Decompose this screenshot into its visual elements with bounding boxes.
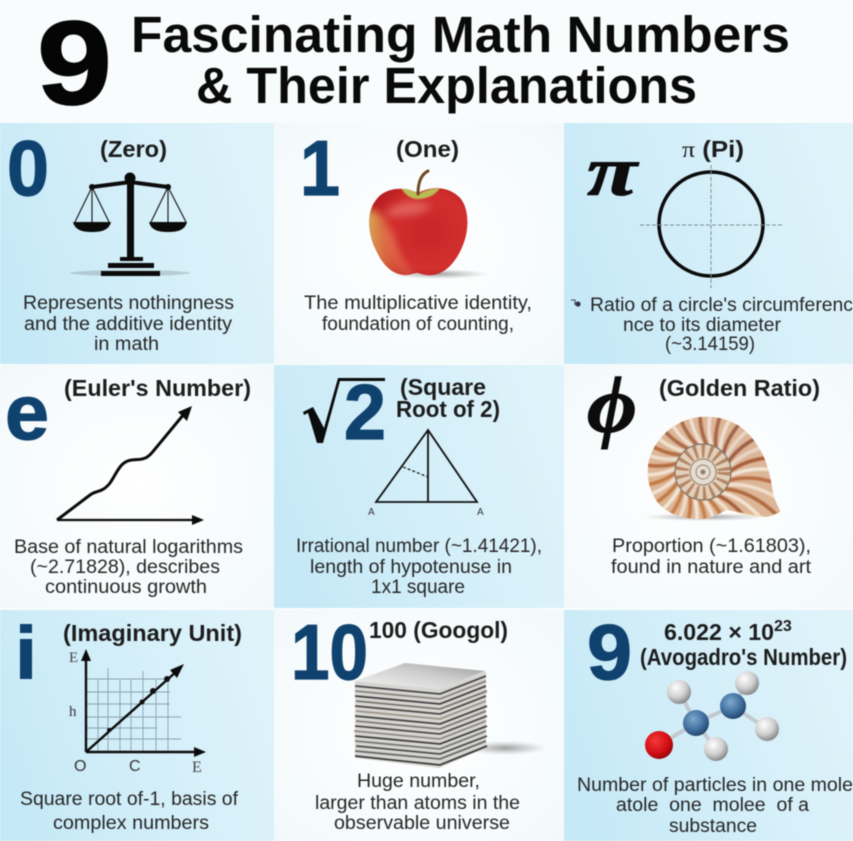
- heading pi: π (Pi): [682, 136, 744, 162]
- heading square root: Root of 2): [396, 396, 500, 422]
- description golden ratio: found in nature and art: [611, 556, 812, 578]
- description googol: [315, 770, 520, 834]
- description avogadro: atole one molee of a: [616, 794, 809, 816]
- description googol: observable universe: [334, 812, 510, 834]
- symbol phi: ϕ: [587, 362, 637, 450]
- symbol i: [20, 624, 32, 679]
- panel: one: [303, 139, 531, 335]
- icon: stack of paper: [354, 663, 547, 768]
- symbol e: e: [5, 368, 49, 456]
- symbol pi: π: [587, 134, 639, 211]
- number 2: 2: [344, 368, 386, 456]
- panel: zero: [0, 123, 274, 364]
- heading avogadro value: 6.022 × 10: [664, 619, 774, 645]
- description square root: 1x1 square: [371, 576, 465, 598]
- panel: golden ratio: [586, 375, 820, 574]
- description pi: (~3.14159): [665, 333, 755, 355]
- chart: complex plane: O: [74, 758, 86, 775]
- description golden ratio: Proportion (~1.61803),: [612, 535, 811, 557]
- panel: imaginary unit: [0, 610, 274, 841]
- description avogadro: [577, 774, 853, 837]
- icon: triangle diagram: A: [368, 507, 375, 518]
- title block: [37, 0, 790, 130]
- description euler: (~2.71828), describes: [30, 556, 220, 578]
- icon: triangle diagram: [368, 430, 484, 518]
- chart: complex plane: E: [192, 759, 202, 776]
- description googol: Huge number,: [357, 770, 480, 792]
- icon: snail shell: [647, 416, 780, 520]
- description pi: Ratio of a circle's circumferenc: [590, 294, 853, 316]
- chart: complex plane: E: [69, 650, 78, 666]
- heading square root: (Square: [400, 374, 486, 400]
- panel: square root of 2: [274, 365, 564, 608]
- chart: complex plane: C: [129, 758, 141, 775]
- number 10: 10: [291, 608, 368, 696]
- description imaginary unit: [20, 788, 239, 834]
- heading googol: 100 (Googol): [369, 617, 508, 643]
- description avogadro: Number of particles in one mole: [577, 774, 853, 796]
- heading golden ratio: (Golden Ratio): [659, 375, 820, 401]
- description square root: length of hypotenuse in: [310, 556, 512, 578]
- heading square root: [396, 374, 500, 422]
- icon: small bullet mark: [571, 300, 581, 307]
- radical sign: [303, 378, 385, 443]
- description pi: nce to its diameter: [623, 314, 781, 336]
- description euler: [14, 536, 243, 598]
- number 0: 0: [7, 124, 49, 212]
- heading avogadro value: 23: [774, 618, 792, 635]
- description euler: continuous growth: [45, 576, 207, 598]
- icon: molecule: [645, 671, 779, 761]
- heading one: (One): [396, 136, 459, 162]
- description one: foundation of counting,: [322, 313, 514, 335]
- description zero: [23, 292, 234, 355]
- title line 2: & Their Explanations: [196, 57, 697, 114]
- description zero: Represents nothingness: [23, 292, 234, 314]
- chart: complex plane: [69, 649, 206, 776]
- heading euler: (Euler's Number): [64, 375, 251, 401]
- panel: avogadro: [564, 608, 853, 841]
- icon: circle with axes: [640, 165, 782, 288]
- description golden ratio: [611, 535, 812, 578]
- chart: growth curve: [57, 406, 204, 525]
- panel: pi: [564, 123, 853, 364]
- description square root: [296, 535, 542, 598]
- description imaginary unit: Square root of-1, basis of: [20, 788, 239, 810]
- chart: complex plane: h: [69, 704, 77, 720]
- heading imaginary unit: (Imaginary Unit): [63, 620, 242, 646]
- description googol: larger than atoms in the: [315, 792, 520, 814]
- number 9: 9: [587, 608, 632, 696]
- big numeral 9: 9: [37, 0, 112, 130]
- description euler: Base of natural logarithms: [14, 536, 243, 558]
- number 1: 1: [300, 124, 340, 212]
- description pi: [590, 294, 853, 355]
- description avogadro: substance: [669, 815, 757, 837]
- description one: [304, 292, 532, 335]
- description zero: and the additive identity: [24, 313, 232, 335]
- icon: triangle diagram: A: [477, 507, 484, 518]
- description imaginary unit: complex numbers: [53, 812, 209, 834]
- description one: The multiplicative identity,: [304, 292, 532, 314]
- panel: euler: [0, 365, 274, 608]
- panel: googol: [274, 608, 564, 841]
- icon: apple: [368, 168, 482, 278]
- heading zero: (Zero): [100, 136, 167, 162]
- title line 1: Fascinating Math Numbers: [131, 6, 790, 63]
- description square root: Irrational number (~1.41421),: [296, 535, 542, 557]
- icon: balance scale: [70, 172, 190, 276]
- description zero: in math: [94, 333, 159, 355]
